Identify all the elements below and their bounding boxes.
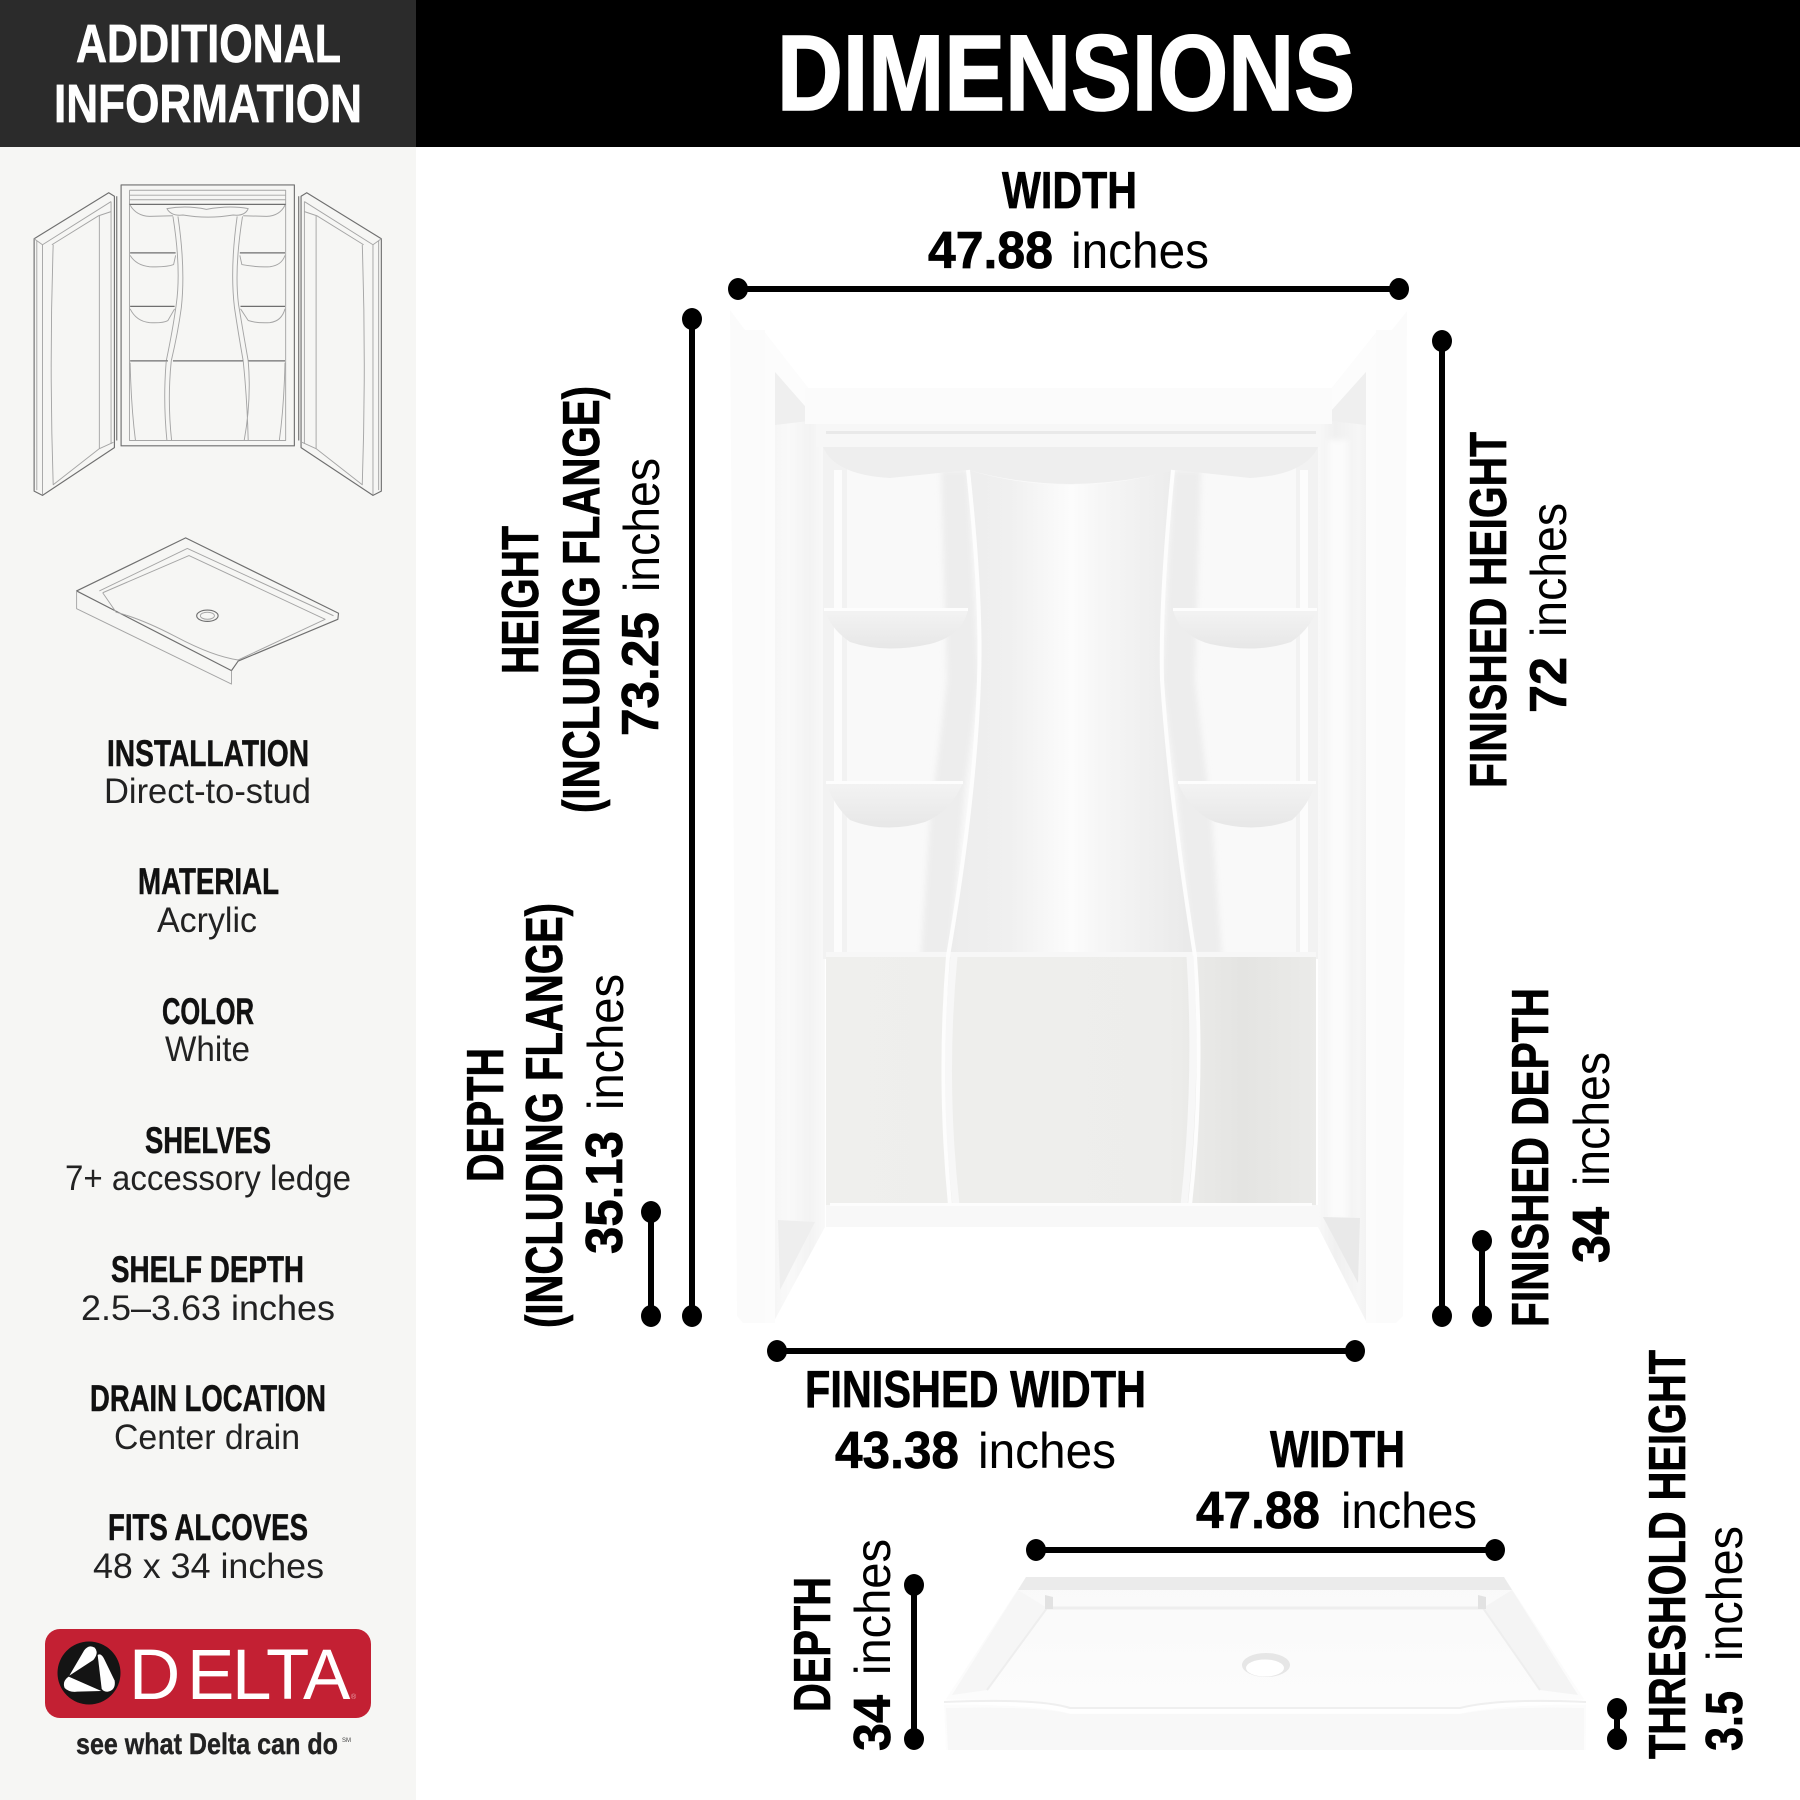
- spec: installation: [104, 733, 311, 811]
- label: threshold height: [1639, 1350, 1754, 1759]
- spec: material: MATERIAL: [138, 861, 279, 902]
- spec: material: Acrylic: [157, 901, 257, 940]
- label: finished width: FINISHED WIDTH: [805, 1361, 1146, 1419]
- label: depth including flange: 35.13: [576, 1131, 634, 1254]
- dimension line: depth including flange: [641, 1201, 661, 1327]
- label: height including flange: (INCLUDING FLANGE): [553, 386, 611, 813]
- logo: delta: see what Delta can do: [76, 1728, 338, 1761]
- label: finished width: inches: [978, 1423, 1116, 1479]
- spec: drain location: [90, 1378, 326, 1457]
- spec: shelves: [65, 1120, 351, 1198]
- label: finished depth: [1502, 988, 1621, 1327]
- label: depth including flange: inches: [578, 974, 634, 1110]
- dimension line: wall width: [728, 278, 1409, 300]
- spec: drain location: Center drain: [114, 1418, 300, 1457]
- label: wall width: WIDTH: [1002, 162, 1137, 220]
- panel: sidebar background: [0, 147, 416, 1800]
- label: wall width: inches: [1071, 223, 1209, 279]
- spec: color: [162, 991, 254, 1069]
- spec: fits alcoves: [93, 1507, 324, 1586]
- dimension line: base depth: [904, 1574, 924, 1750]
- dimension line: finished width: [767, 1340, 1365, 1362]
- dimension line: base width: [1026, 1539, 1505, 1561]
- label: base width: 47.88: [1196, 1482, 1320, 1540]
- header: dimensions title: DIMENSIONS: [777, 12, 1355, 133]
- label: finished height: 72: [1520, 657, 1578, 713]
- spec: color: White: [165, 1030, 250, 1069]
- spec: shelves: SHELVES: [145, 1120, 271, 1161]
- logo: delta: [45, 1629, 371, 1761]
- product: shower wall photo: [730, 310, 1407, 1323]
- header: dimensions title: [416, 0, 1800, 147]
- label: wall width: 47.88: [928, 222, 1053, 280]
- spec: installation: INSTALLATION: [107, 733, 309, 774]
- label: height including flange: inches: [614, 458, 670, 592]
- label: base depth: DEPTH: [784, 1577, 842, 1712]
- dimension line: height including flange: [682, 308, 702, 1327]
- dimension line: finished height: [1432, 330, 1452, 1327]
- label: base depth: 34: [844, 1695, 902, 1751]
- spec: shelf depth: 2.5–3.63 inches: [81, 1289, 335, 1328]
- label: base depth: [784, 1539, 902, 1751]
- label: depth including flange: DEPTH: [457, 1048, 515, 1182]
- label: base width: [1196, 1421, 1477, 1540]
- label: base width: inches: [1341, 1483, 1477, 1539]
- spec: drain location: DRAIN LOCATION: [90, 1378, 326, 1419]
- spec: fits alcoves: 48 x 34 inches: [93, 1547, 324, 1586]
- logo: delta: SM: [342, 1738, 351, 1744]
- label: finished depth: 34: [1563, 1207, 1621, 1263]
- label: wall width: [928, 162, 1209, 280]
- label: finished height: inches: [1521, 503, 1577, 637]
- label: height including flange: [492, 386, 670, 813]
- header: additional information: ADDITIONAL: [76, 14, 341, 74]
- spec: shelves: 7+ accessory ledge: [65, 1159, 351, 1198]
- spec: shelf depth: [81, 1249, 335, 1328]
- label: threshold height: THRESHOLD HEIGHT: [1639, 1350, 1697, 1759]
- logo: delta: ®: [351, 1693, 357, 1701]
- label: threshold height: inches: [1697, 1526, 1753, 1661]
- icon: shower base line drawing: [77, 538, 339, 684]
- icon: wall panels line drawing: [34, 185, 381, 684]
- product: shower base photo: [944, 1577, 1586, 1750]
- label: finished width: [805, 1361, 1146, 1480]
- spec: color: COLOR: [162, 991, 254, 1032]
- spec: installation: Direct-to-stud: [104, 772, 311, 811]
- label: base depth: inches: [845, 1539, 901, 1675]
- spec: shelf depth: SHELF DEPTH: [111, 1249, 304, 1290]
- label: finished width: 43.38: [835, 1422, 959, 1480]
- label: depth including flange: (INCLUDING FLANGE): [516, 903, 574, 1328]
- label: finished height: [1460, 432, 1578, 788]
- label: height including flange: HEIGHT: [492, 526, 550, 674]
- header: additional information: INFORMATION: [54, 74, 362, 134]
- label: base width: WIDTH: [1270, 1421, 1405, 1479]
- label: depth including flange: [457, 903, 634, 1328]
- spec: fits alcoves: FITS ALCOVES: [108, 1507, 308, 1548]
- header: additional information: [0, 0, 416, 147]
- label: height including flange: 73.25: [612, 612, 670, 736]
- label: threshold height: 3.5: [1696, 1691, 1754, 1751]
- spec: material: [138, 861, 279, 940]
- dimension line: threshold height: [1607, 1698, 1627, 1750]
- label: finished depth: inches: [1564, 1052, 1620, 1186]
- logo: delta: DELTA: [129, 1636, 351, 1715]
- dimension line: finished depth: [1472, 1230, 1492, 1327]
- label: finished depth: FINISHED DEPTH: [1502, 988, 1560, 1327]
- label: finished height: FINISHED HEIGHT: [1460, 432, 1518, 788]
